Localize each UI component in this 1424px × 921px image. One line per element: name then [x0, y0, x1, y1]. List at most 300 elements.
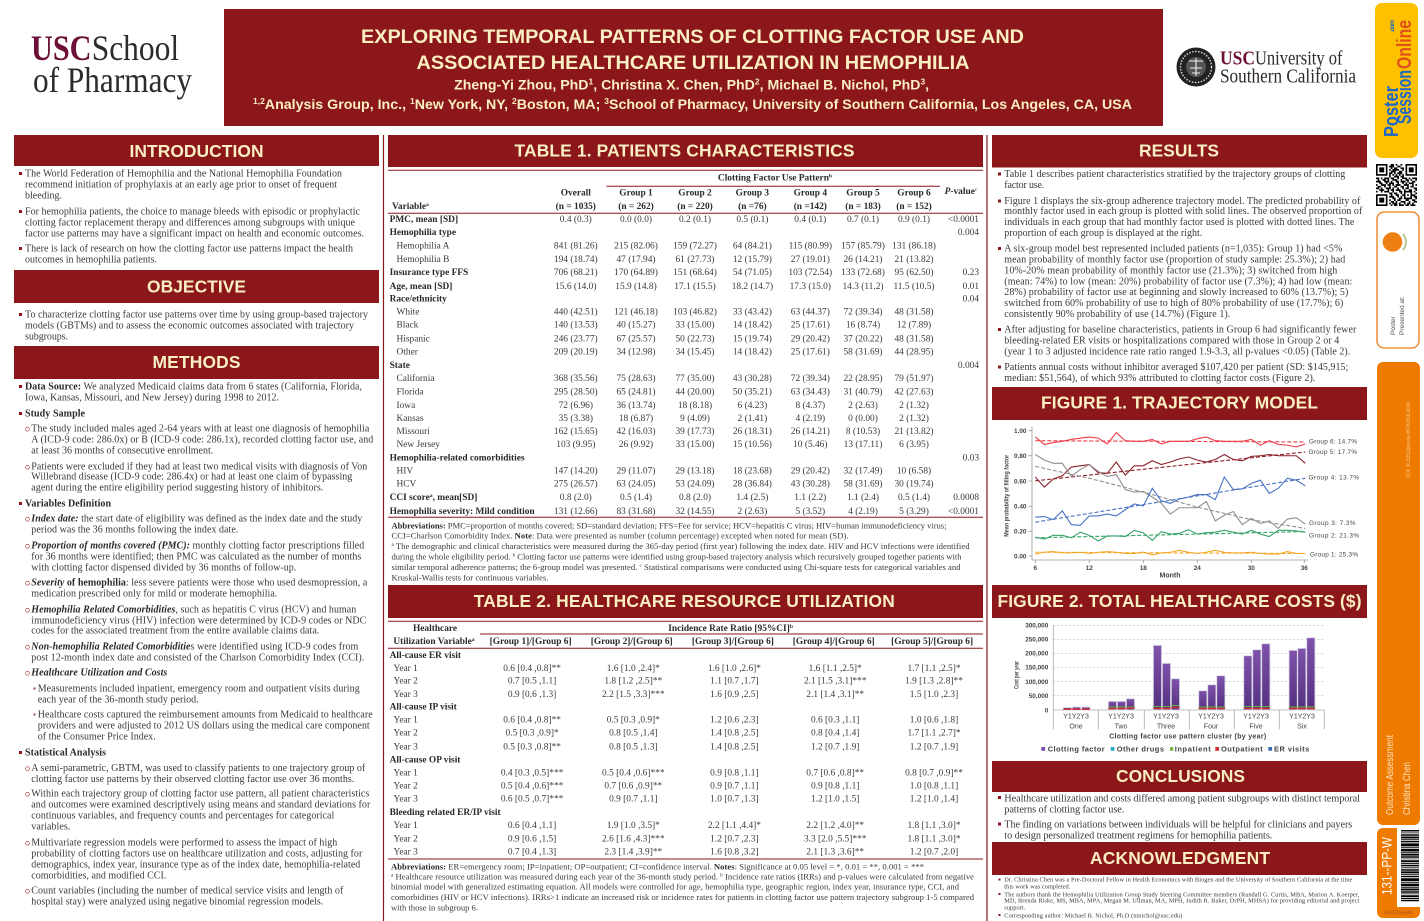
axis tick labels: 24 [1194, 565, 1201, 572]
table 2 footnotes: with those in subgroup 6. [391, 902, 478, 912]
table 2 body: 0.9 [0.7 ,1.1] [710, 782, 759, 792]
table 1 body: 0.04 [963, 295, 979, 305]
table 1 body: 5 (3.29) [899, 506, 929, 517]
table 1 body: <0.0001 [948, 215, 979, 225]
table 1 body: 131 (86.18) [892, 241, 936, 252]
table 2 body: 1.2 [0.7 ,1.9] [811, 743, 859, 753]
table 1 header: Group 5 [846, 189, 880, 199]
table 1 body: 5 (3.52) [795, 506, 825, 517]
table 2 body: 2.2 [1.1 ,4.4]* [708, 821, 761, 831]
table 1 body: 2 (1.41) [738, 413, 767, 424]
table 1 header: Group 1 [619, 189, 653, 199]
table 2 body: 0.8 [0.4 ,1.4] [811, 729, 859, 739]
methods: variables definition: for 36 months were identified; then PMC was calculated as the number of months [31, 552, 361, 563]
table 1 body [390, 214, 979, 517]
table 1 body: 8 (10.53) [846, 426, 880, 437]
table 1 body: 26 (14.21) [791, 426, 830, 437]
table 1 body: 25 (17.61) [791, 320, 830, 331]
table 1 body: 194 (18.74) [554, 254, 598, 265]
logo: PosterSessionOnline: .com [1389, 20, 1396, 32]
table 2 body: 0.7 [0.4 ,1.3] [508, 848, 556, 858]
table 2 body: 1.6 [1.0 ,2.4]* [607, 664, 660, 674]
heading: methods: METHODS [152, 352, 240, 372]
heading: table 2: TABLE 2. HEALTHCARE RESOURCE UTILIZATION [474, 591, 895, 611]
panel: session details: Outcome Assessment [1384, 735, 1396, 815]
panel: results [992, 135, 1367, 384]
table 1 header: (n = 262) [618, 201, 654, 212]
table 2 body: 0.8 [0.5 ,1.4] [609, 729, 658, 739]
table 2 body: All-cause ER visit [390, 651, 462, 661]
table 1 body: 22 (28.95) [843, 373, 883, 384]
table 1 header: (n =142) [794, 201, 827, 212]
table 2 body: Year 2 [394, 835, 418, 845]
axis tick labels: 0.60 [1014, 478, 1027, 485]
table 1 body: 58 (31.69) [843, 347, 883, 358]
table 2 body: Year 3 [394, 743, 418, 753]
table 2 body: 0.7 [0.6 ,0.8]** [806, 769, 864, 779]
legend [1041, 744, 1309, 754]
table 1 body: 54 (71.05) [733, 267, 772, 278]
table 1 body: 95 (62.50) [894, 267, 934, 278]
table 2 body: 1.9 [1.3 ,2.8]** [905, 677, 963, 687]
heading: objective [14, 270, 379, 303]
panel: objective [14, 270, 379, 343]
panel: figure 2 total healthcare costs [992, 585, 1367, 754]
table 1 body: 15 (10.56) [733, 439, 772, 450]
table 1 header: (n = 1035) [556, 201, 596, 212]
heading: table 1 [388, 135, 983, 167]
panel: poster id and barcode [1377, 828, 1420, 918]
table 2 body: Year 2 [394, 677, 418, 687]
table 1 body: 77 (35.00) [675, 373, 715, 384]
table 2 body: 1.8 [1.1 ,3.0]* [907, 835, 961, 845]
heading: objective: OBJECTIVE [147, 276, 246, 296]
table 1 body: 43 (30.28) [791, 479, 830, 490]
axis labels: 250,000 [1025, 636, 1049, 644]
table 1 body: 48 (31.58) [894, 334, 934, 345]
table 1 body: 4 (2.19) [795, 413, 825, 424]
axis labels: One [1069, 724, 1083, 730]
table 1 header: (n = 183) [845, 201, 881, 212]
acknowledgment notes [998, 876, 1360, 919]
methods: statistical analysis: continuous variables, and frequency counts and percentages for categorical [31, 811, 335, 822]
table 1 body: 48 (31.58) [894, 307, 934, 318]
table 1 body: 0.5 (1.4) [620, 492, 652, 503]
introduction bullets: factor use patterns may have a significant impact on health and economic outcomes. [25, 229, 364, 240]
methods: statistical analysis: probability of clotting factors use on healthcare utilization and costs, adjusting for [31, 849, 363, 860]
methods: study sample: Willebrand disease (ICD-9 code: 286.4x) or had at least one claim of bypassing [31, 472, 352, 483]
results bullets: After adjusting for baseline characteristics, patients in Group 6 had significantly fewer [1004, 325, 1357, 336]
heading: figure 2: FIGURE 2. TOTAL HEALTHCARE COSTS ($) [998, 591, 1362, 611]
results bullets: Patients annual costs without inhibitor averaged $107,420 per patient (SD: $145,915; [1004, 362, 1349, 373]
results bullets [998, 169, 1363, 384]
table 1 footnotes: similar temporal adherence patterns; the 6-group model was presented. c Statistical comparisons were conducted using Chi-square tests for categorical variables and [392, 562, 961, 572]
results bullets: 28%) probability of factor use at beginning and slowly increased to 60% (13.7%); 5) [1004, 287, 1348, 298]
column dividers [384, 135, 987, 921]
table 2 header [393, 624, 973, 647]
bars [1063, 638, 1315, 710]
table 1 body: 72 (6.96) [559, 400, 593, 411]
table 2 body: 2.2 [1.2 ,4.0]** [806, 821, 864, 831]
table 1 footnotes: Abbreviations: PMC=proportion of months covered; SD=standard deviation; FFS=Fee for service; HCV=hepatitis C virus; HIV=human immunodeficiency virus; [392, 520, 946, 530]
table 2 body: 0.9 [0.8 ,1.1] [811, 782, 859, 792]
panel: session details: Christina Chen [1401, 762, 1413, 815]
table 1 body: 47 (17.94) [616, 254, 656, 265]
methods: study sample: agent during the entire eligibility period suggesting history of inhibitors. [31, 483, 323, 494]
table 1 body: HCV [396, 480, 417, 490]
methods: variables definition: Variables Definition [25, 499, 111, 510]
table 1 body: 0.01 [963, 282, 979, 292]
table 2 footnotes: binomial model with generalized estimating equation. All models were controlled for age, hemophilia type, geographic region, index year, insurance type, CCI, and [391, 881, 960, 891]
methods: variables definition: of the Consumer Price Index. [38, 732, 156, 743]
table 1 body: 33 (15.00) [675, 439, 715, 450]
table 1 body: 79 (51.97) [894, 373, 934, 384]
table 1 body: 0.8 (2.0) [560, 492, 592, 503]
table 1 body: Insurance type FFS [390, 268, 468, 278]
table 1 body: 2 (1.32) [899, 413, 929, 424]
table 1 body: 44 (20.00) [675, 387, 715, 398]
axis tick labels: 6 [1034, 565, 1038, 572]
panel: introduction [14, 135, 379, 266]
poster title [361, 26, 1024, 74]
methods: variables definition: Severity of hemophilia: less severe patients were those who used desmopression, a [31, 578, 368, 589]
introduction bullets: The World Federation of Hemophilia and the National Hemophilia Foundation [25, 169, 342, 180]
legend: Inpatient [1175, 744, 1211, 754]
sidebar [1375, 3, 1420, 918]
methods: study sample [19, 409, 373, 494]
authors: Zheng-Yi Zhou, PhD1, Christina X. Chen, PhD2, Michael B. Nichol, PhD3, [454, 76, 929, 92]
table 1 body: 1.1 (2.2) [794, 492, 826, 503]
methods: variables definition: period was the 36 months following the index date. [31, 525, 238, 536]
stacked bar chart: costs [1014, 622, 1324, 754]
panel: presented at: Presented at: [1399, 296, 1406, 335]
table 1 header: (n =76) [738, 201, 767, 212]
table 1 body: 14 (18.42) [733, 347, 772, 358]
heading: introduction: INTRODUCTION [130, 141, 264, 161]
introduction bullets: recommend initiation of prophylaxis at an early age prior to onset of frequent [25, 180, 337, 191]
results bullets: (year 1 to 3 adjusted incidence rate ratio ranged 1.9-3.3, all p-values <0.05) (Table 2). [1004, 347, 1350, 358]
series labels: Group 1: 25.3% [1310, 551, 1358, 558]
table 1 footnotes: CCI=Charlson Comorbidity Index. Note: Data were presented as number (column percentage) excepted when noted for mean (SD). [392, 531, 848, 541]
logo: University of Southern California [1176, 48, 1356, 88]
axis tick labels: 0.80 [1014, 453, 1027, 460]
table 2 body: Year 1 [394, 821, 418, 831]
table 1 body: 63 (24.05) [616, 479, 656, 490]
table 2 body: 1.2 [1.0 ,1.4] [910, 795, 958, 805]
table 1 body: 0.0 (0.0) [620, 214, 652, 225]
table 1 body: 14.3 (11.2) [842, 281, 884, 292]
logo: PosterSessionOnline: Session [1394, 70, 1416, 124]
table 1 body: 33 (15.00) [675, 320, 715, 331]
table 2 body: Year 2 [394, 782, 418, 792]
table 2 body: Year 1 [394, 716, 418, 726]
table 1 body: 162 (15.65) [554, 426, 598, 437]
table 1 body: 75 (28.63) [616, 373, 656, 384]
table 2 body: 1.5 [1.0 ,2.3] [910, 690, 958, 700]
table 1 body: 115 (80.99) [789, 241, 832, 252]
panel: session details: DOI: 10.3252/pso.eu.WFH2016.2016 [1406, 402, 1412, 478]
methods: study sample: at least 36 months of consecutive enrollment. [31, 446, 213, 457]
methods: data source: Iowa, Kansas, Missouri, and New Jersey) during 1998 to 2012. [25, 393, 279, 404]
heading: acknowledgment: ACKNOWLEDGMENT [1090, 848, 1270, 868]
table 1 body: 30 (19.74) [894, 479, 934, 490]
table 2 body: 1.8 [1.2 ,2.5]** [604, 677, 663, 687]
heading: conclusions [992, 761, 1367, 792]
results bullets: 10%-20% mean probability of monthly factor use (21.3%); 3) switched from high [1004, 266, 1337, 277]
poster title: EXPLORING TEMPORAL PATTERNS OF CLOTTING FACTOR USE AND [361, 26, 1024, 48]
table 1 body: 0.2 (0.1) [679, 214, 711, 225]
panel: acknowledgment [992, 842, 1367, 919]
table 1 header: Group 2 [678, 189, 712, 199]
table 1 body: 32 (14.55) [675, 506, 715, 517]
axis labels: 200,000 [1025, 650, 1049, 658]
table 1 body: 43 (30.28) [733, 373, 772, 384]
heading: acknowledgment [992, 842, 1367, 875]
table 2 body: 1.8 [1.1 ,3.0]* [907, 821, 961, 831]
table 1 body: 50 (22.73) [675, 334, 715, 345]
table 1 body: 0 (0.00) [848, 413, 878, 424]
logo: PosterSessionOnline: Online [1394, 20, 1416, 69]
table 1 header: Group 3 [736, 189, 769, 199]
table 1 body: 0.5 (0.1) [736, 214, 768, 225]
table 1 body: Hemophilia severity: Mild condition [390, 507, 535, 517]
table 1 body: 295 (28.50) [554, 387, 598, 398]
axis tick labels: 36 [1301, 565, 1308, 572]
legend: Outpatient [1221, 744, 1263, 754]
heading: results: RESULTS [1139, 140, 1219, 160]
heading: methods [14, 346, 379, 379]
table 1 body: 0.03 [963, 454, 979, 464]
methods: variables definition: codes for the associated treatment from the entire available claims data. [31, 626, 319, 637]
axis tick labels: 12 [1086, 565, 1093, 572]
results bullets: Table 1 describes patient characteristics stratified by the trajectory groups of clotting [1004, 169, 1345, 180]
table 2 body: 1.6 [0.8 ,3.2] [710, 848, 759, 858]
table 1 body: 0.4 (0.3) [560, 214, 592, 225]
table 1 body: 0.4 (0.1) [794, 214, 826, 225]
table 1 body: 0.5 (1.4) [898, 492, 930, 503]
table 2 body: 1.6 [1.0 ,2.6]* [708, 664, 761, 674]
table 2 body: 1.2 [0.7 ,2.0] [910, 848, 958, 858]
table 2 body: 0.6 [0.5 ,0.7]*** [501, 795, 564, 805]
table 1 body: 6 (3.95) [899, 439, 929, 450]
table 1 body: 18 (6.87) [619, 413, 653, 424]
axis tick labels: Month [1160, 572, 1180, 580]
table 2 body: 1.0 [0.6 ,1.8] [910, 716, 958, 726]
conclusions bullets [998, 793, 1360, 841]
table 1 body: 17.3 (15.0) [790, 281, 831, 292]
table 2 body: 0.9 [0.8 ,1.1] [710, 769, 759, 779]
table 2 body: 0.7 [0.6 ,0.9]** [604, 782, 663, 792]
logo: University of Southern California: Southern California [1220, 66, 1356, 88]
table 1 header: Group 6 [897, 189, 931, 199]
table 1 body: 12 (7.89) [897, 320, 931, 331]
table 1 body: HIV [396, 467, 413, 477]
table 1 body: 26 (18.31) [733, 426, 772, 437]
axis labels: 0 [1045, 707, 1049, 714]
methods: variables definition: Healthcare Utilization and Costs [30, 668, 167, 679]
table 1 body: 42 (16.03) [616, 426, 656, 437]
table 1 body: 13 (17.11) [844, 439, 882, 450]
results bullets: median: $51,564), of which 93% attributed to clotting factor costs (Figure 2). [1004, 373, 1315, 384]
table 2 rules [388, 621, 983, 859]
table 1 body: 131 (12.66) [554, 506, 598, 517]
table 2 body: 1.2 [0.6 ,2.3] [710, 716, 759, 726]
methods: study sample: A (ICD-9 code: 286.0x) or B (ICD-9 code: 286.1x), recorded clotting factor use, and [31, 435, 373, 446]
table 1 header: Group 4 [794, 189, 827, 199]
table 1 body: Kansas [396, 414, 424, 424]
results bullets: mean probability of monthly factor use (proportion of study sample: 25.3%); 2) had [1004, 255, 1345, 266]
methods: variables definition: Hemophilia Related Comorbidities, such as hepatitis C virus (HCV) and human [30, 605, 356, 616]
table 2 header: Incidence Rate Ratio [95%CI]b [668, 624, 793, 634]
table 1 body: California [396, 373, 435, 384]
axis labels: Six [1297, 724, 1307, 730]
table 1 body: 63 (44.37) [791, 307, 830, 318]
table 2 body: 0.5 [0.3 ,0.9]* [506, 729, 559, 739]
axis tick labels: 30 [1248, 565, 1255, 572]
table 1 body: 841 (81.26) [554, 241, 598, 252]
acknowledgment notes: Dr. Christina Chen was a Pre-Doctoral Fellow in Health Economics with Biogen and the University of Southern California at the time [1004, 876, 1353, 884]
axis labels: Four [1204, 724, 1219, 730]
methods: statistical analysis: hospital stay) were analyzed using negative binomial regression models. [31, 897, 323, 908]
table 2 body: Year 1 [394, 769, 418, 779]
acknowledgment notes: this work was completed. [1004, 884, 1071, 890]
table 1 body: 10 (6.58) [897, 466, 931, 477]
table 2 body: 1.2 [0.7 ,1.9] [910, 743, 958, 753]
panel: conclusions [992, 761, 1367, 841]
table 1 body: 21 (13.82) [894, 254, 934, 265]
panel: presented at [1377, 212, 1419, 348]
table 1 body: Black [396, 321, 419, 331]
panel: figure 1 trajectory model [992, 387, 1367, 580]
axis labels: Two [1115, 724, 1128, 730]
table 2 body: 0.4 [0.3 ,0.5]*** [501, 769, 564, 779]
methods: study sample: The study included males aged 2-64 years with at least one diagnosis of hemophilia [31, 424, 370, 435]
table 1 body: 15.9 (14.8) [615, 281, 657, 292]
logo: USC School of Pharmacy [31, 28, 192, 100]
table 1 body: 0.004 [958, 228, 979, 238]
table 1 header: Overall [561, 189, 591, 199]
results bullets: individuals in each group that had monthly factor used is plotted with dotted lines. The [1004, 217, 1355, 228]
methods: data source: Data Source: We analyzed Medicaid claims data from 6 states (California, Florida, [25, 382, 362, 393]
axis labels: 150,000 [1025, 664, 1049, 672]
heading: introduction [14, 135, 379, 166]
table 2 body: 1.6 [0.9 ,2.5] [710, 690, 759, 700]
table 1 body: 2 (2.63) [738, 506, 767, 517]
legend: Other drugs [1117, 744, 1164, 754]
table 2 body: 0.5 [0.4 ,0.6]*** [602, 769, 665, 779]
table 2 body: 0.5 [0.3 ,0.8]** [503, 743, 561, 753]
table 1 body: 29 (20.42) [791, 334, 830, 345]
table 2 footnotes: comorbidities (HIV or HCV infections). IRRs>1 indicate an increased risk or incidence rates for patients in clotting factor use pattern trajectory subgroup 1-5 compared [391, 892, 975, 902]
axis tick labels: 0.20 [1014, 529, 1027, 536]
axis labels: 50,000 [1029, 693, 1049, 700]
table 1 body: 0.004 [958, 361, 979, 371]
axis labels: Three [1157, 724, 1175, 730]
table 2 body: 3.3 [2.0 ,5.5]*** [804, 835, 867, 845]
methods: variables definition: providers and were adjusted to 2012 US dollars using the medical care component [38, 721, 370, 732]
table 1 body: Hemophilia B [396, 255, 449, 265]
table 1 body: 39 (17.73) [675, 426, 715, 437]
methods: variables definition: Index date: the start date of eligibility was defined as the index date and the study [30, 514, 362, 525]
axis labels: Five [1249, 724, 1263, 730]
conclusions bullets: The finding on variations between individuals will be helpful for clinicians and payers [1004, 820, 1352, 831]
axis tick labels: Mean probability of filling factor [1004, 454, 1011, 537]
table 1 body: 103 (72.54) [788, 267, 832, 278]
table 1 body: 133 (72.68) [841, 267, 885, 278]
results bullets: switched from 60% probability of use to high of 80% probability of use (17.7%); 6) [1004, 298, 1343, 309]
series labels: Group 6: 14.7% [1309, 438, 1357, 445]
table 1 body: 26 (14.21) [843, 254, 883, 265]
table 1 body: 36 (13.74) [616, 400, 656, 411]
table 2 body: 0.6 [0.4 ,0.8]** [503, 716, 561, 726]
table 1 body: 0.23 [963, 268, 979, 278]
heading: figure 1 [992, 387, 1367, 420]
methods: statistical analysis: clotting factor use patterns by their observed clotting factor use over 36 months. [31, 774, 354, 785]
table 2 body: Year 3 [394, 848, 418, 858]
series labels: Group 5: 17.7% [1308, 449, 1357, 456]
introduction bullets [19, 169, 364, 266]
introduction bullets: For hemophilia patients, the choice to manage bleeds with episodic or prophylactic [25, 207, 361, 218]
heading: conclusions: CONCLUSIONS [1116, 766, 1245, 786]
series labels: Group 3: 7.3% [1309, 520, 1356, 527]
table 1 body: New Jersey [396, 440, 440, 450]
table 1 body: Hispanic [396, 335, 430, 345]
table 2 body: All-cause IP visit [390, 703, 458, 713]
methods: variables definition: Measurements included inpatient, emergency room and outpatient visits during [38, 684, 360, 695]
table 1 body: 18.2 (14.7) [732, 281, 773, 292]
table 1 body: 72 (39.34) [843, 307, 883, 318]
methods: variables definition: post 12-month index date and consisted of the Charlson Comorbidity Index (CCI). [31, 653, 364, 664]
methods: statistical analysis: demographics, index year, insurance type as of the index date, hemophilia-related [31, 860, 360, 871]
table 1 body: 4 (2.19) [848, 506, 878, 517]
acknowledgment notes: support. [1004, 904, 1026, 911]
conclusions bullets: Healthcare utilization and costs differed among patient subgroups with distinct temporal [1004, 793, 1360, 804]
series labels: Group 4: 13.7% [1308, 474, 1359, 481]
panel: session details [1377, 362, 1420, 825]
acknowledgment notes: MD, Brenda Riske, MS, MBA, MPA, Megan M. Ullman, MA, MPH, Judith R. Baker, DrPH, MHSA) for providing editorial and project [1004, 898, 1360, 905]
table 1 body: 0.0008 [953, 493, 979, 503]
methods: statistical analysis: Statistical Analysis [25, 748, 106, 759]
table 1 header: Variablea [392, 202, 429, 212]
table 2 header: [Group 1]/[Group 6] [490, 637, 572, 647]
table 2 header: [Group 4]/[Group 6] [793, 637, 875, 647]
table 2 body: 0.8 [0.5 ,1.3] [609, 743, 658, 753]
heading: table 2 [388, 585, 983, 618]
table 1 body: 0.9 (0.1) [898, 214, 930, 225]
acknowledgment notes: Corresponding author: Michael B. Nichol, Ph.D (mnichol@usc.edu) [1004, 912, 1182, 919]
table 1 body: 34 (15.45) [675, 347, 715, 358]
table 1 body: 209 (20.19) [554, 347, 598, 358]
table 1 body: 157 (85.79) [841, 241, 885, 252]
results bullets: monthly factor used in each group is plotted with solid lines. The observed proportion of [1004, 206, 1363, 217]
table 1 body: 103 (46.82) [673, 307, 717, 318]
methods: statistical analysis: variables. [31, 822, 70, 833]
icon: congress logo [1383, 232, 1406, 252]
table 1 body: 29 (11.07) [617, 466, 655, 477]
methods: statistical analysis: comorbidities, and modified CCI. [31, 871, 166, 882]
axis tick labels: 18 [1140, 565, 1147, 572]
table 2 body: 0.6 [0.3 ,1.1] [811, 716, 859, 726]
axis labels: Y1Y2Y3 [1198, 714, 1224, 720]
table 1 body: 35 (3.38) [559, 413, 593, 424]
table 2 body: 1.6 [1.1 ,2.5]* [809, 664, 862, 674]
methods: statistical analysis: A semi-parametric, GBTM, was used to classify patients to one trajectory group of [31, 763, 366, 774]
logo: USC School of Pharmacy: of Pharmacy [33, 60, 192, 100]
methods: statistical analysis: and outcomes were examined descriptively using means and standard deviations for [31, 800, 371, 811]
logo: USC School of Pharmacy: USC [31, 28, 92, 68]
table 1 body: 16 (8.74) [846, 320, 880, 331]
axis labels: Y1Y2Y3 [1243, 714, 1269, 720]
